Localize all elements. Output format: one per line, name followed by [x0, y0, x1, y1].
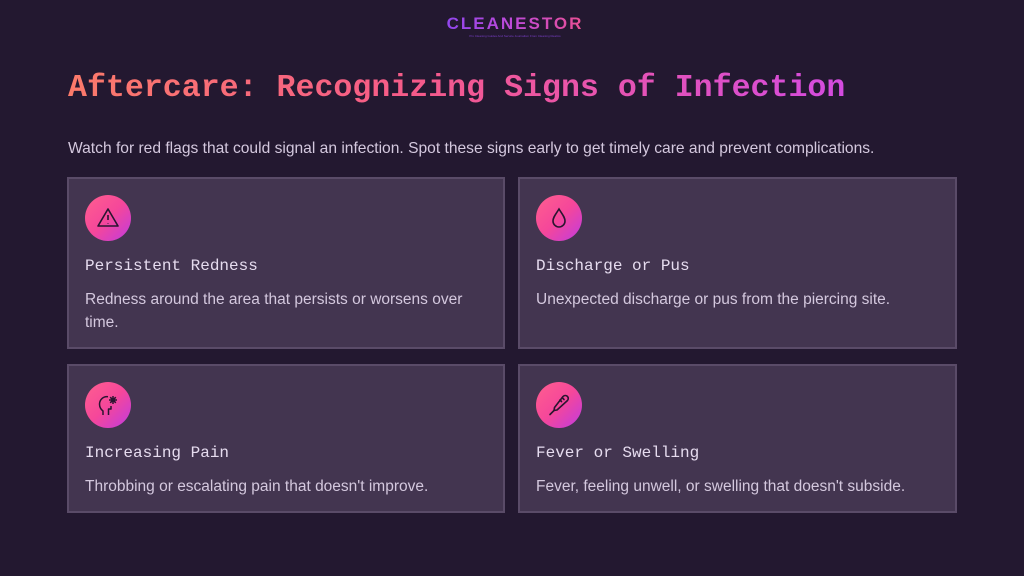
panel: discharge [518, 177, 957, 349]
heading: Persistent Redness [85, 257, 258, 275]
logo: CLEANESTOR [447, 14, 583, 33]
title: Aftercare: Recognizing Signs of Infection [68, 71, 845, 106]
subtitle: Watch for red flags that could signal an infection. Spot these signs early to get timely care and prevent complications. [68, 140, 874, 157]
heading: Fever or Swelling [536, 444, 699, 462]
text: Unexpected discharge or pus from the piercing site. [536, 291, 890, 308]
heading: Discharge or Pus [536, 257, 690, 275]
panel: persistent redness [67, 177, 505, 349]
text: Redness around the area that persists or worsens over time. [85, 291, 462, 331]
heading: Increasing Pain [85, 444, 229, 462]
icon: warning [85, 195, 131, 241]
icon: thermometer [536, 382, 582, 428]
text: Fever, feeling unwell, or swelling that doesn't subside. [536, 478, 905, 495]
logo: Pro Cleaning Guides And Service Journalism From Cleaning Realms [469, 34, 561, 38]
icon: head pain [85, 382, 131, 428]
icon: drop [536, 195, 582, 241]
panel: pain [67, 364, 505, 513]
panel: fever [518, 364, 957, 513]
text: Throbbing or escalating pain that doesn't improve. [85, 478, 428, 495]
